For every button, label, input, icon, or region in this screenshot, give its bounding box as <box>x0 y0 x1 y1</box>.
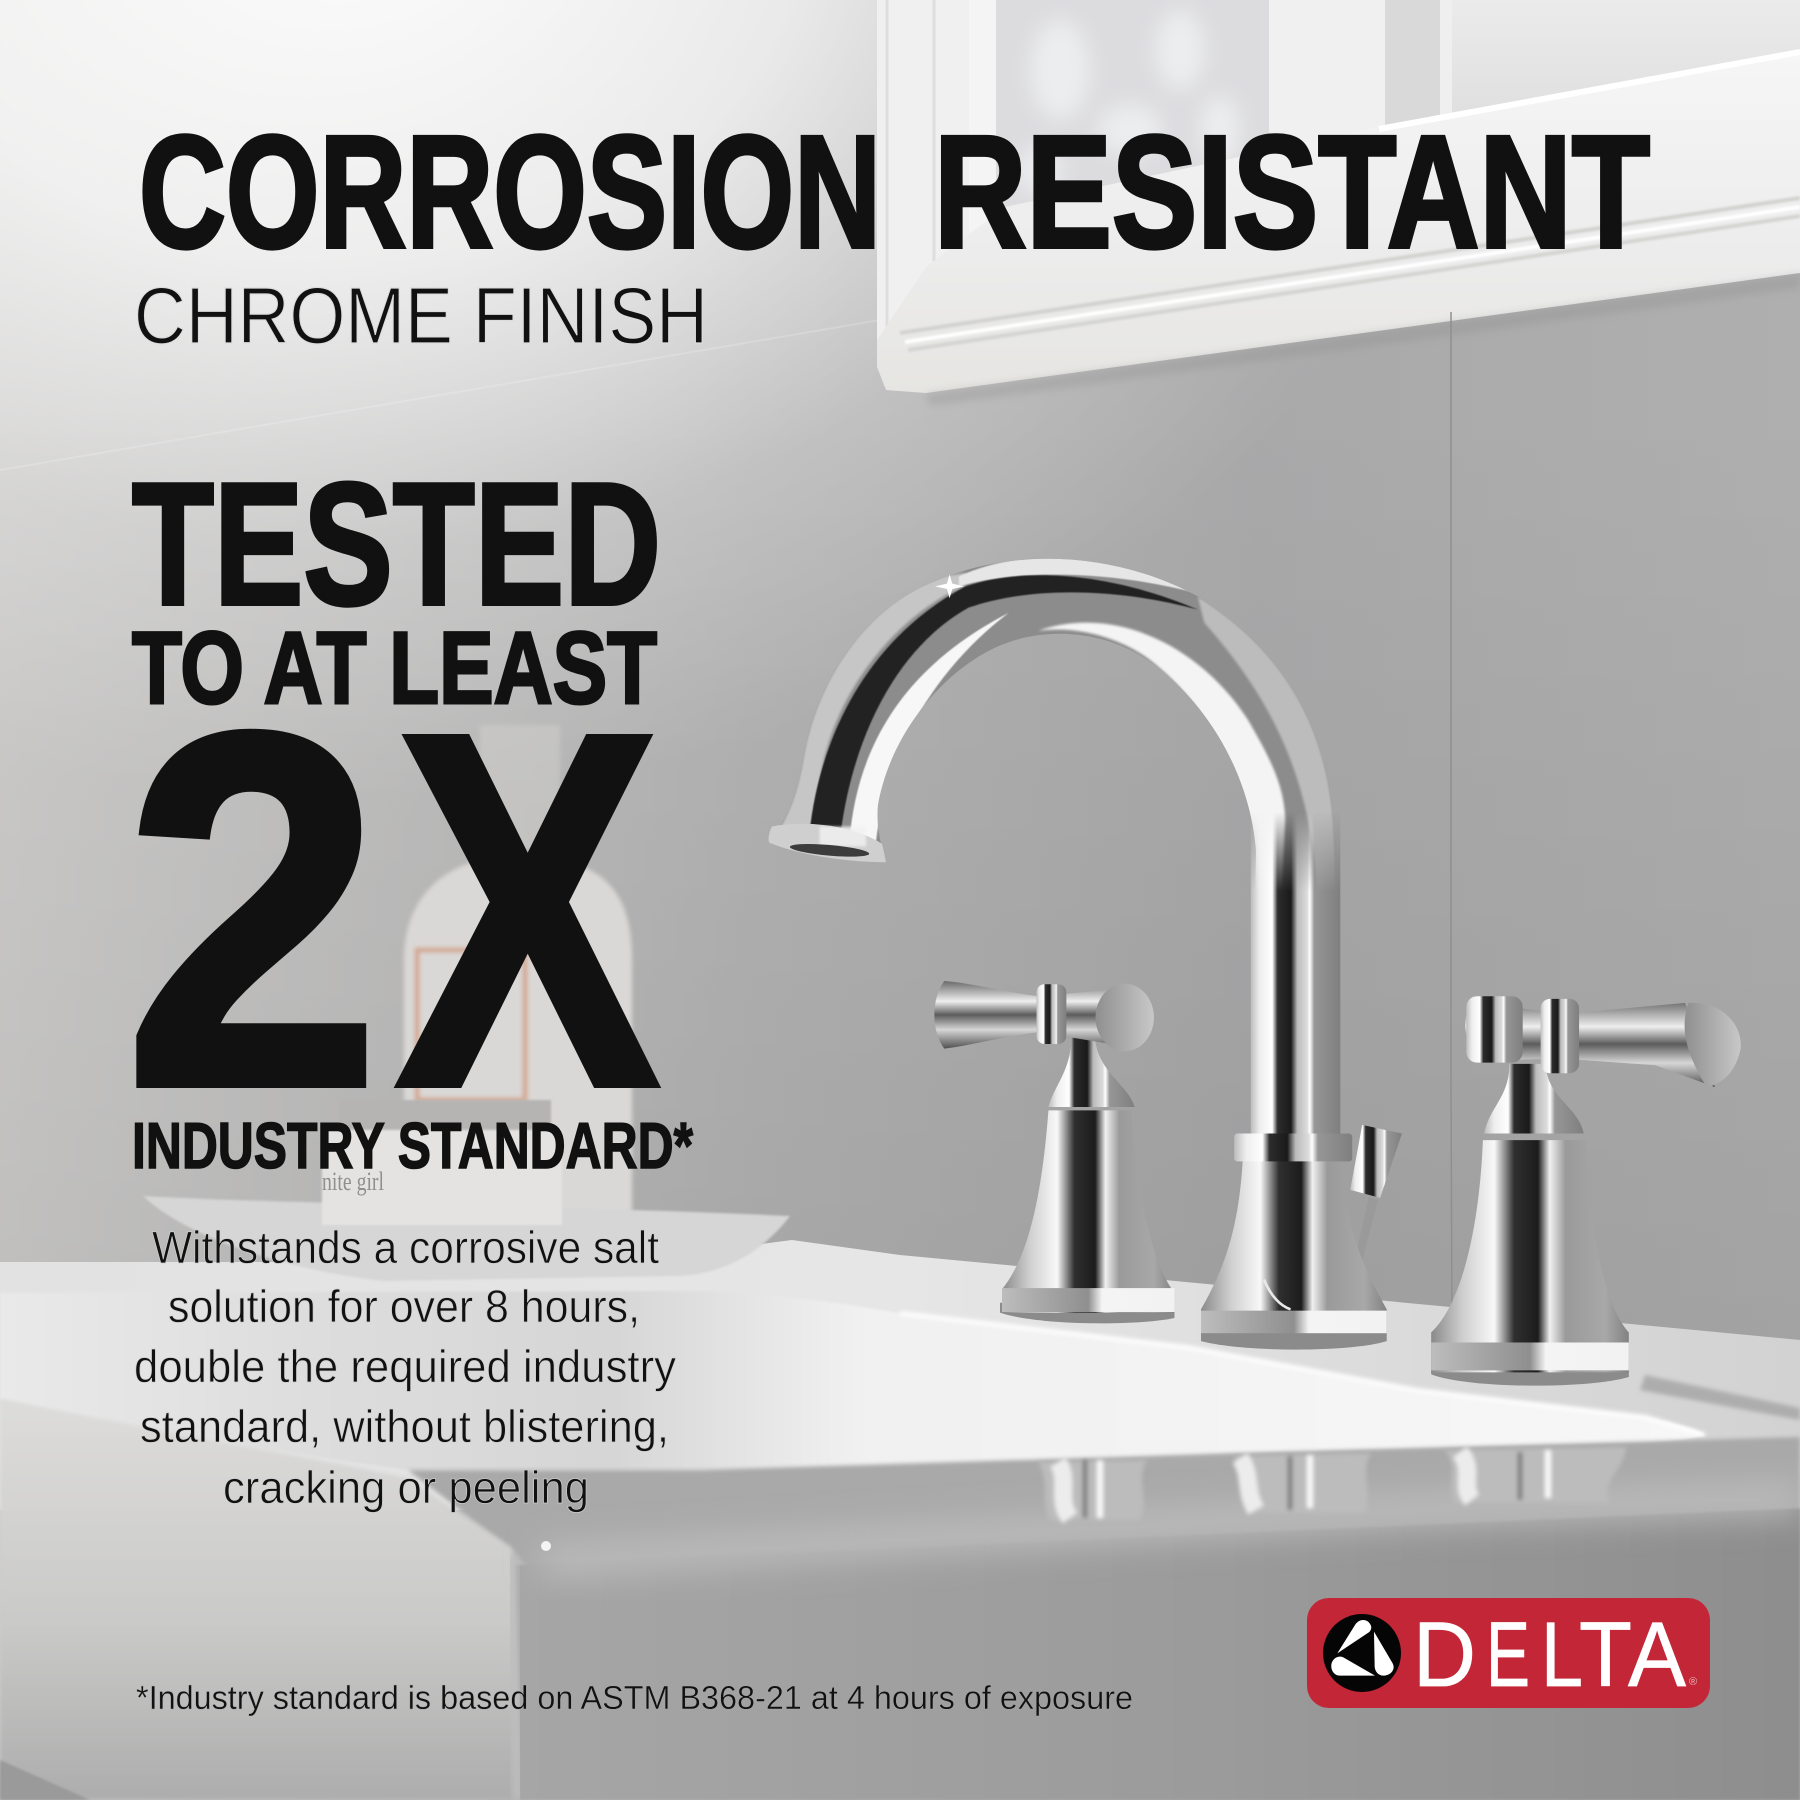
glints <box>541 1541 551 1551</box>
description: cracking or peeling <box>223 1462 589 1513</box>
lower wall shading <box>0 400 1800 1350</box>
window right frame <box>1269 0 1452 230</box>
counter top <box>0 1240 1800 1510</box>
window left frame <box>877 0 996 367</box>
nozzle aerator <box>789 842 870 859</box>
description: Withstands a corrosive salt <box>152 1222 659 1273</box>
headline: to at least: TO AT LEAST <box>132 611 657 725</box>
logo wordmark: A <box>1628 1604 1687 1706</box>
spout dark band <box>810 575 1198 832</box>
spout <box>769 557 1340 1137</box>
left handle <box>934 981 1174 1313</box>
headline: 2X <box>124 629 661 1191</box>
footnote: *Industry standard is based on ASTM B368-21 at 4 hours of exposure <box>136 1679 1133 1716</box>
shadow under molding <box>926 274 1800 406</box>
logo triangle mark <box>1331 1620 1394 1676</box>
basin back rim highlight <box>900 1313 1705 1435</box>
description: double the required industry <box>134 1341 676 1392</box>
title <box>139 102 1650 281</box>
basin interior <box>0 1291 1705 1470</box>
column <box>1251 812 1340 1137</box>
description <box>134 1222 676 1513</box>
headline: industry standard: INDUSTRY STANDARD* <box>132 1109 694 1182</box>
title: CORROSION <box>139 102 881 281</box>
front lit band <box>540 1498 1800 1562</box>
window glass <box>996 0 1269 280</box>
left wall tile seams <box>0 320 880 470</box>
upper-left bright wash <box>0 0 1800 950</box>
right handle <box>1431 996 1741 1372</box>
pop-up rod <box>1350 1125 1402 1268</box>
spout nozzle <box>769 824 886 862</box>
spout right outer band <box>1197 596 1334 878</box>
bottom left wedge <box>0 1760 90 1800</box>
jar <box>322 1100 562 1225</box>
window sill molding <box>877 50 1800 393</box>
dish <box>143 1196 790 1281</box>
nozzle highlight <box>820 826 866 846</box>
headline: 2X: X <box>396 629 661 1191</box>
spout top highlight <box>958 558 1188 592</box>
glint <box>935 574 964 598</box>
spout outer light band left <box>781 572 966 825</box>
subtitle: CHROME FINISH <box>134 271 708 360</box>
description: solution for over 8 hours, <box>168 1281 640 1332</box>
spout left highlight <box>849 613 1009 842</box>
headline: 2X: 2 <box>124 629 381 1191</box>
faucet reflections <box>1038 1447 1626 1520</box>
ledge <box>408 1437 1800 1570</box>
upper right wall <box>1452 0 1800 150</box>
sill highlight top <box>1379 52 1800 129</box>
logo wordmark: D <box>1413 1604 1476 1706</box>
contact shadows <box>1000 1303 1629 1386</box>
sill ledge lines <box>900 198 1800 350</box>
center base <box>1201 1134 1387 1333</box>
spout right highlight <box>1038 623 1285 918</box>
bottle <box>404 725 632 1230</box>
headline: tested: TESTED <box>132 446 661 641</box>
logo wordmark: L <box>1541 1604 1583 1706</box>
front left face <box>0 1399 525 1800</box>
faucet <box>769 557 1741 1386</box>
logo wordmark: T <box>1579 1604 1632 1706</box>
logo wordmark: E <box>1486 1604 1530 1706</box>
wall tile seam <box>1451 312 1452 1330</box>
logo badge <box>1307 1598 1710 1708</box>
faucet shadows on counter <box>1640 1375 1800 1420</box>
description: standard, without blistering, <box>140 1401 669 1452</box>
logo wordmark <box>1413 1604 1687 1706</box>
corner highlight <box>512 1555 518 1800</box>
registered mark: ® <box>1689 1676 1697 1688</box>
jar label text: nite girl <box>322 1167 384 1196</box>
logo circle <box>1323 1614 1401 1692</box>
front right face <box>515 1508 1800 1800</box>
Delta logo <box>1307 1598 1710 1708</box>
